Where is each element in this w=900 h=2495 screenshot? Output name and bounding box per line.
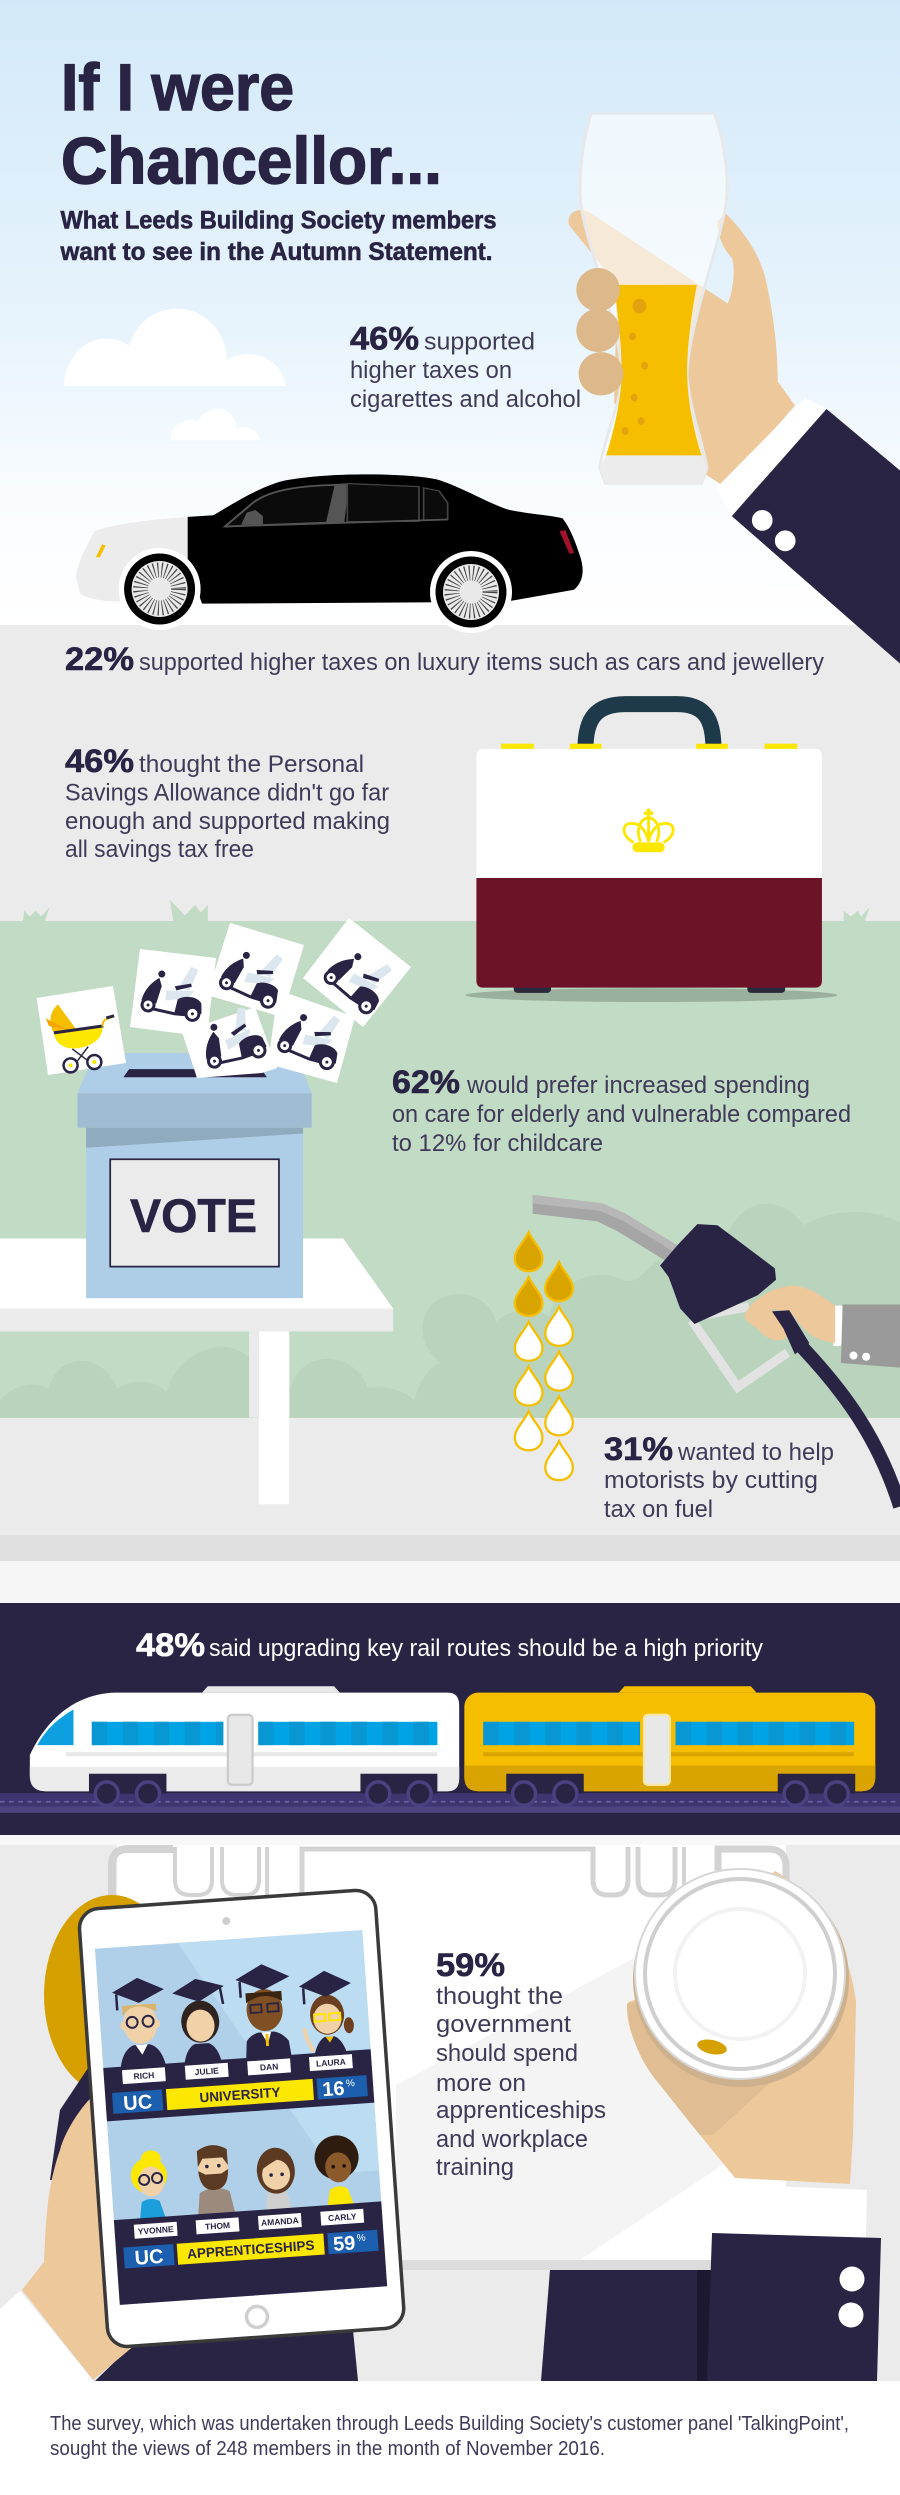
icon: crown [624,809,673,852]
stat: care for elderly [392,1064,851,1157]
ballot papers [37,918,411,1083]
stat: care for elderly: on care for elderly and vulnerable compared [392,1101,851,1128]
desk background [0,1845,900,2381]
stat: savings: Savings Allowance didn't go far [65,780,389,806]
university results band: DAN [260,2061,279,2073]
rail panel background [0,1603,900,1835]
pavement kerb [0,1535,900,1561]
grey ground band [0,625,900,921]
subtitle: want to see in the Autumn Statement. [60,238,492,266]
stat: fuel tax: tax on fuel [604,1496,713,1523]
illustration: yellow train [464,1686,875,1805]
stat: luxury items: 22% [65,641,134,677]
paper: scooter 2 [207,923,304,1017]
pale strip [0,1561,900,1603]
person: Laura [298,1969,356,2058]
subtitle [60,206,496,266]
subtitle: What Leeds Building Society members [60,206,496,234]
title: Chancellor... [61,124,442,198]
apprenticeships results band: UC [134,2246,164,2270]
stat: cigarettes and alcohol: higher taxes on [350,357,512,384]
stat: luxury items: supported higher taxes on luxury items such as cars and jewellery [139,649,824,676]
apprenticeships results band: APPRENTICESHIPS [187,2238,315,2262]
stat: savings: thought the Personal [139,751,364,778]
illustration: tablet [78,1889,405,2348]
stat: apprenticeships: more on [436,2070,526,2097]
pale strip under rail panel [0,1835,900,1845]
footer note: sought the views of 248 members in the month of November 2016. [50,2438,605,2460]
university results band: LAURA [316,2057,346,2069]
university results band: UNIVERSITY [199,2085,281,2105]
apprenticeships results band: THOM [205,2220,230,2232]
apprenticeships results band: CARLY [328,2211,357,2223]
person: Thom [193,2144,235,2215]
person: Dan [234,1962,295,2062]
university results band: RICH [133,2070,155,2081]
stat: apprenticeships: apprenticeships [436,2097,606,2124]
illustration: suit sleeve [716,398,900,664]
vote label: VOTE [130,1190,257,1243]
apprenticeships results band: AMANDA [261,2215,299,2228]
stat: savings [65,743,390,863]
illustration: left arm behind tablet [0,1895,358,2381]
stat: apprenticeships [436,1947,606,2181]
university results band: % [346,2078,355,2090]
university results band: JULIE [194,2065,219,2077]
title: If I were [61,50,294,124]
stat: apprenticeships: training [436,2154,514,2181]
stat: rail routes: 48% [136,1627,205,1663]
sky background [0,0,900,625]
illustration: hand holding beer glass [569,114,795,487]
vote sign [110,1159,279,1267]
stat: apprenticeships: 59% [436,1947,505,1983]
paper: scooter 1 [130,949,216,1037]
stat: luxury items [65,641,824,677]
background grass and bushes [0,900,900,1418]
stat: savings: enough and supported making [65,808,390,835]
stat: fuel tax [604,1431,834,1523]
illustration: table [0,1238,393,1504]
stat: fuel tax: wanted to help [677,1439,834,1466]
illustration: fuel pump nozzle and hand [533,1195,900,1507]
apprenticeships results band [114,2201,387,2305]
illustration: white train [30,1686,459,1805]
illustration: luxury car [76,474,583,633]
stat: cigarettes and alcohol: 46% [350,320,419,356]
person: Yvonne [129,2149,170,2221]
illustration: ballot box [77,1053,312,1298]
illustration: red budget briefcase [465,704,837,1002]
stat: fuel tax: motorists by cutting [604,1467,818,1494]
stat: apprenticeships: government [436,2011,571,2038]
stat: care for elderly: 62% [392,1064,460,1100]
stat: fuel tax: 31% [604,1431,673,1467]
stat: savings: 46% [65,743,134,779]
paper: pram [37,986,126,1075]
illustration: coffee cup held in hand [627,1869,856,2184]
stat: cigarettes and alcohol [350,320,581,413]
university results band [103,2049,374,2121]
paper: scooter 4 [182,1003,277,1078]
stat: apprenticeships: should spend [436,2040,578,2067]
person: Rich [111,1976,169,2071]
illustration: notebook on desk [112,1845,786,2270]
stat: cigarettes and alcohol: supported [424,328,535,356]
stat: care for elderly: to 12% for childcare [392,1130,603,1157]
stat: care for elderly: would prefer increased spending [466,1072,810,1099]
person: Amanda [255,2146,298,2212]
university results band: UC [123,2091,153,2115]
stat: apprenticeships: and workplace [436,2126,588,2153]
stat: cigarettes and alcohol: cigarettes and alcohol [350,386,581,413]
footer note [50,2413,849,2460]
illustration: rail track [0,1793,900,1813]
person: Carly [313,2134,362,2207]
illustration: right suit sleeve [541,2184,881,2381]
stat: savings: all savings tax free [65,836,254,863]
title [61,50,442,198]
stat: rail routes [136,1627,763,1663]
person: Julie [171,1977,229,2066]
apprenticeships results band: YVONNE [137,2224,174,2236]
lower grey pavement [0,1418,900,1535]
footer note: The survey, which was undertaken through Leeds Building Society's customer panel 'TalkingPoint', [50,2413,849,2435]
stat: rail routes: said upgrading key rail routes should be a high priority [209,1635,763,1662]
apprenticeships results band: % [356,2233,366,2244]
illustration: clouds [64,309,286,440]
apprenticeships results band: 59 [332,2232,356,2256]
illustration: fuel drops [515,1232,573,1480]
stat: apprenticeships: thought the [436,1983,563,2010]
university results band: 16 [322,2078,345,2101]
green field background [0,921,900,1418]
paper: scooter 5 [268,990,355,1083]
paper: scooter 3 [303,918,411,1027]
